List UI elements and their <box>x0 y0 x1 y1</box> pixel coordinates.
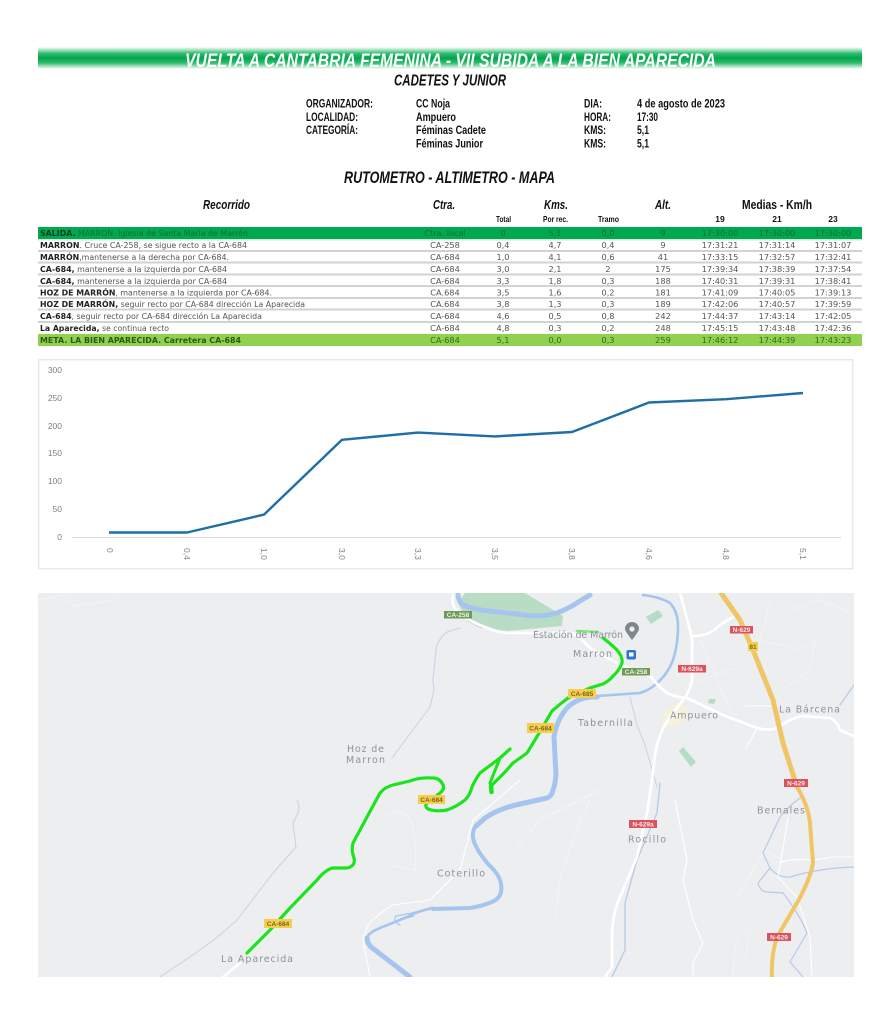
road shields: N-629 <box>733 627 751 634</box>
parks and urban areas <box>458 593 716 767</box>
row: salida: 17:30:00 <box>815 228 851 238</box>
x axis labels <box>105 548 808 560</box>
row: km 3,3: CA-684 <box>430 276 460 286</box>
row: CA-258: 17:31:07 <box>815 240 851 250</box>
road shields: CA-258 <box>447 612 470 619</box>
y axis labels <box>48 365 62 542</box>
row: salida: 5,1 <box>548 228 562 238</box>
event details: CC Noja <box>416 98 450 110</box>
row: km 1,0: CA-684 <box>430 252 460 262</box>
row: km 3,0: 17:37:54 <box>815 264 851 274</box>
row: km 3,0: 2,1 <box>548 264 562 274</box>
place names <box>221 630 840 965</box>
table column headers: Tramo <box>598 214 619 224</box>
x axis labels: 3,0 <box>337 548 347 560</box>
x axis labels: 4,8 <box>721 548 731 560</box>
table column headers: Kms. <box>544 197 568 212</box>
event details: Ampuero <box>416 112 456 124</box>
x axis labels: 4,6 <box>644 548 654 560</box>
row: km 3,0: 3,0 <box>496 264 510 274</box>
row: km 3,8 <box>40 298 851 309</box>
row: km 3,3: 17:38:41 <box>815 276 851 286</box>
road shields: CA-684 <box>267 921 290 928</box>
x axis labels: 3,8 <box>567 548 577 560</box>
row: km 4,6: 0,5 <box>548 311 562 321</box>
row: CA-258: 17:31:21 <box>702 240 738 250</box>
place names: Hoz de <box>347 744 384 755</box>
row: km 4,8: 0,3 <box>548 323 562 333</box>
row: salida: SALIDA. MARRON. Iglesia de Santa Maria de Marrón <box>40 228 248 238</box>
road shields: N-629a <box>632 822 654 828</box>
row: km 3,5: CA.684 <box>430 288 460 298</box>
event details: CATEGORÍA: <box>306 124 358 137</box>
place names: Coterillo <box>437 868 485 880</box>
row: km 1,0: 17:32:41 <box>815 252 851 262</box>
event details: HORA: <box>584 112 611 124</box>
row: km 3,0: 2 <box>605 264 611 274</box>
y axis labels: 150 <box>48 448 62 458</box>
place names: La Bárcena <box>779 704 840 716</box>
row: km 3,3: 17:40:31 <box>702 276 738 286</box>
table column headers: Medias - Km/h <box>742 197 812 212</box>
road shields: N-629a <box>681 666 703 673</box>
event details: LOCALIDAD: <box>306 112 358 124</box>
row: km 3,3: 17:39:31 <box>759 276 795 286</box>
row: meta: CA-684 <box>430 335 460 345</box>
minor tracks <box>38 596 850 977</box>
row: CA-258: MARRON. Cruce CA-258, se sigue recto a la CA-684 <box>40 240 247 250</box>
row: km 3,3: CA-684, mantenerse a la izquierda por CA-684 <box>40 276 227 286</box>
map background <box>38 593 854 977</box>
row: CA-258 <box>40 240 851 250</box>
row: meta: 259 <box>655 335 671 345</box>
table column headers: 21 <box>772 214 782 224</box>
row: km 3,0: CA-684, mantenerse a la izquierda por CA-684 <box>40 264 227 274</box>
row: km 1,0: 17:33:15 <box>702 252 738 262</box>
event details: Féminas Junior <box>416 138 483 150</box>
row: km 4,8: 248 <box>655 323 671 333</box>
row: km 4,6: 4,6 <box>496 311 510 321</box>
row: km 3,8: 17:39:59 <box>815 299 851 309</box>
row: km 3,5: 17:40:05 <box>759 288 795 298</box>
row: salida: 0 <box>500 228 506 238</box>
row: km 4,8: La Aparecida, se continua recto <box>40 323 169 333</box>
table column headers: Recorrido <box>203 197 250 212</box>
y axis labels: 300 <box>48 365 62 375</box>
x axis labels: 1,0 <box>259 548 269 560</box>
icon: station pin <box>625 622 639 640</box>
row: km 3,5: 0,2 <box>601 288 615 298</box>
road shields: CA-685 <box>571 691 594 698</box>
y axis labels: 0 <box>57 532 62 542</box>
row: km 1,0: 41 <box>658 252 668 262</box>
row: km 3,8: CA.684 <box>430 299 460 309</box>
row: km 3,3: 1,8 <box>548 276 562 286</box>
row: km 4,8: 17:45:15 <box>702 323 738 333</box>
x axis labels: 5,1 <box>798 548 808 560</box>
place names: Estación de Marrón <box>533 630 623 641</box>
table column headers: 23 <box>828 214 838 224</box>
row: km 1,0 <box>40 251 851 262</box>
x axis <box>72 536 841 538</box>
road shields: N-629 <box>770 934 788 942</box>
row: meta: 17:46:12 <box>702 335 738 345</box>
header block <box>38 48 862 187</box>
white roads <box>223 593 854 977</box>
y axis labels: 50 <box>53 504 62 514</box>
road shields: CA-684 <box>529 726 552 732</box>
row: km 3,5: 17:41:09 <box>702 288 738 298</box>
row: km 1,0: 4,1 <box>548 252 562 262</box>
table column headers: Alt. <box>654 197 671 212</box>
row: km 4,6: CA-684, seguir recto por CA-684 dirección La Aparecida <box>40 311 262 321</box>
row: salida: 0,0 <box>601 228 615 238</box>
title banner: VUELTA A CANTABRIA FEMENINA - VII SUBIDA A LA BIEN APARECIDA <box>185 50 716 72</box>
route table <box>38 197 862 346</box>
row: meta: META. LA BIEN APARECIDA. Carretera CA-684 <box>40 335 241 345</box>
y axis labels: 100 <box>48 476 62 486</box>
row: km 4,6 <box>40 311 851 321</box>
chart frame <box>39 360 853 569</box>
table column headers: Total <box>496 214 511 224</box>
place names: Tabernilla <box>577 718 633 729</box>
row: CA-258: 0,4 <box>496 240 510 250</box>
row bands <box>38 227 862 346</box>
row: km 3,5: 17:39:13 <box>815 288 851 298</box>
row: km 3,5: HOZ DE MARRÓN, mantenerse a la izquierda por CA-684. <box>40 286 272 298</box>
rivers and streams <box>160 595 854 977</box>
row: km 3,0: 17:38:39 <box>759 264 795 274</box>
row: km 3,3: 188 <box>655 276 671 286</box>
row: salida: 17:30:00 <box>759 228 795 238</box>
row: CA-258: CA-258 <box>430 240 460 250</box>
route map <box>38 593 854 977</box>
row: CA-258: 0,4 <box>601 240 615 250</box>
row: meta: 17:44:39 <box>759 335 795 345</box>
row: meta: 0,3 <box>601 335 615 345</box>
row: km 1,0: 0,6 <box>601 252 615 262</box>
event details <box>306 98 725 150</box>
subtitle: CADETES Y JUNIOR <box>394 72 507 90</box>
row: CA-258: 4,7 <box>548 240 562 250</box>
table column headers: Ctra. <box>433 197 455 212</box>
row: km 3,3: 0,3 <box>601 276 615 286</box>
event details: KMS: <box>584 138 606 150</box>
table column headers: Por rec. <box>543 214 568 224</box>
row: CA-258: 17:31:14 <box>759 240 795 250</box>
road shields: N-629 <box>787 780 805 788</box>
elevation line chart <box>38 359 854 570</box>
row: km 3,5: 1,6 <box>548 288 562 298</box>
row: meta <box>40 335 851 345</box>
row: km 3,0: 175 <box>655 264 671 274</box>
row: km 4,6: 242 <box>655 311 671 321</box>
road shields: CA-684 <box>420 797 443 804</box>
row: km 3,0: 17:39:34 <box>702 264 738 274</box>
altitude line <box>109 393 803 532</box>
row: salida: 9 <box>660 228 666 238</box>
table column headers <box>203 197 838 224</box>
x axis labels: 0 <box>105 548 115 553</box>
row: km 3,8: 17:40:57 <box>759 299 795 309</box>
event details: 5,1 <box>637 125 649 137</box>
row: km 3,0: CA-684 <box>430 264 460 274</box>
event details: 5,1 <box>637 138 649 150</box>
row: km 4,8 <box>40 323 851 333</box>
row: km 3,5: 3,5 <box>496 288 510 298</box>
row: meta: 0,0 <box>548 335 562 345</box>
row: km 3,0 <box>40 264 851 274</box>
row: km 4,6: 0,8 <box>601 311 615 321</box>
row: km 3,3: 3,3 <box>496 276 510 286</box>
icon: bus stop <box>626 650 636 660</box>
row: km 3,5: 181 <box>655 288 671 298</box>
row: km 4,8: 4,8 <box>496 323 510 333</box>
row: km 3,8: 17:42:06 <box>702 299 738 309</box>
road shields <box>264 611 808 942</box>
x axis labels: 0,4 <box>182 548 192 560</box>
row: km 3,8: 3,8 <box>496 299 510 309</box>
row: km 3,8: HOZ DE MARRÓN, seguir recto por CA-684 dirección La Aparecida <box>40 298 305 309</box>
y axis labels: 250 <box>48 393 62 403</box>
place names: Ampuero <box>670 710 718 722</box>
road shields: CA-258 <box>625 669 648 676</box>
place names: Bernales <box>757 806 805 816</box>
row: km 4,6: 17:44:37 <box>702 311 738 321</box>
row: km 1,0: 17:32:57 <box>759 252 795 262</box>
table column headers: 19 <box>715 214 725 224</box>
row: meta: 17:43:23 <box>815 335 851 345</box>
event details: DIA: <box>584 98 602 110</box>
event details: ORGANIZADOR: <box>306 98 373 110</box>
row: km 4,8: CA-684 <box>430 323 460 333</box>
race route in green <box>247 631 622 953</box>
row: km 4,8: 0,2 <box>601 323 615 333</box>
place names: La Aparecida <box>221 954 293 965</box>
row: meta: 5,1 <box>496 335 510 345</box>
place names: Marron <box>346 755 385 766</box>
event details: 4 de agosto de 2023 <box>637 98 725 110</box>
row: km 4,6: CA-684 <box>430 311 460 321</box>
event details: Féminas Cadete <box>416 125 486 137</box>
row: km 3,8: 189 <box>655 299 671 309</box>
y axis labels: 200 <box>48 421 62 431</box>
row: km 4,6: 17:43:14 <box>759 311 795 321</box>
place names: Marron <box>573 649 612 660</box>
event details: 17:30 <box>637 112 658 124</box>
place names: Rocillo <box>628 834 666 846</box>
row: salida: Ctra. local <box>424 228 466 238</box>
row: salida <box>40 228 851 238</box>
x axis labels: 3,5 <box>490 548 500 560</box>
row: km 1,0: 1,0 <box>496 252 510 262</box>
row: salida: 17:30:00 <box>702 228 738 238</box>
event details: KMS: <box>584 125 606 137</box>
row: km 3,5 <box>40 286 851 298</box>
row: km 3,8: 0,3 <box>601 299 615 309</box>
row: km 3,3 <box>40 276 851 286</box>
x axis labels: 3,3 <box>413 548 423 560</box>
row: km 3,8: 1,3 <box>548 299 562 309</box>
row: km 4,8: 17:43:48 <box>759 323 795 333</box>
row: km 1,0: MARRÓN,mantenerse a la derecha por CA-684. <box>40 251 229 262</box>
row: km 4,6: 17:42:05 <box>815 311 851 321</box>
section heading: RUTOMETRO - ALTIMETRO - MAPA <box>344 168 555 187</box>
row: CA-258: 9 <box>660 240 666 250</box>
road shields: 81 <box>749 644 757 651</box>
motorway <box>721 593 813 977</box>
row: km 4,8: 17:42:36 <box>815 323 851 333</box>
